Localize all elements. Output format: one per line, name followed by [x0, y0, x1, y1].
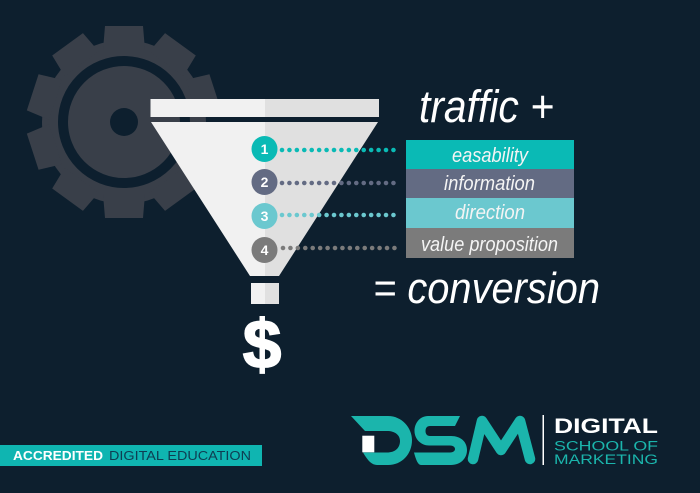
funnel: [150, 99, 379, 304]
bar: value proposition: value proposition: [421, 234, 558, 256]
step 1 marker: [252, 136, 396, 162]
banner: accredited digital education: ACCREDITED: [13, 449, 103, 463]
step 4 marker: 4: [261, 242, 269, 258]
bar: easability: [406, 140, 574, 170]
step 3 marker: [252, 203, 396, 229]
step 2 marker: [252, 169, 396, 195]
logo: DSM Digital School of Marketing: [351, 415, 658, 467]
logo text: DIGITAL: DIGITAL: [554, 415, 658, 438]
logo text: MARKETING: MARKETING: [554, 452, 658, 467]
step 4 marker: [252, 237, 397, 263]
step 1 marker: 1: [261, 141, 269, 157]
logo letter D: [351, 416, 412, 465]
logo text: SCHOOL OF: SCHOOL OF: [554, 438, 658, 454]
bar: easability: easability: [452, 145, 529, 167]
bar: information: [406, 169, 574, 198]
step 3 marker: 3: [261, 208, 269, 224]
bar: direction: direction: [455, 202, 525, 224]
bar: information: information: [444, 173, 535, 195]
logo divider: [542, 415, 544, 465]
banner: accredited digital education: DIGITAL EDUCATION: [109, 449, 251, 463]
logo square: [362, 436, 374, 452]
step 2 marker: 2: [261, 174, 269, 190]
icon: dollar sign: $: [243, 306, 281, 383]
logo letter S: [414, 416, 467, 465]
bar: direction: [406, 198, 574, 228]
heading: traffic +: traffic +: [419, 81, 554, 132]
heading: = conversion: = conversion: [373, 264, 600, 313]
banner: accredited digital education: [0, 445, 262, 466]
bar: value proposition: [406, 228, 574, 258]
icon: gear: [26, 26, 222, 218]
logo letter M: [473, 421, 530, 459]
